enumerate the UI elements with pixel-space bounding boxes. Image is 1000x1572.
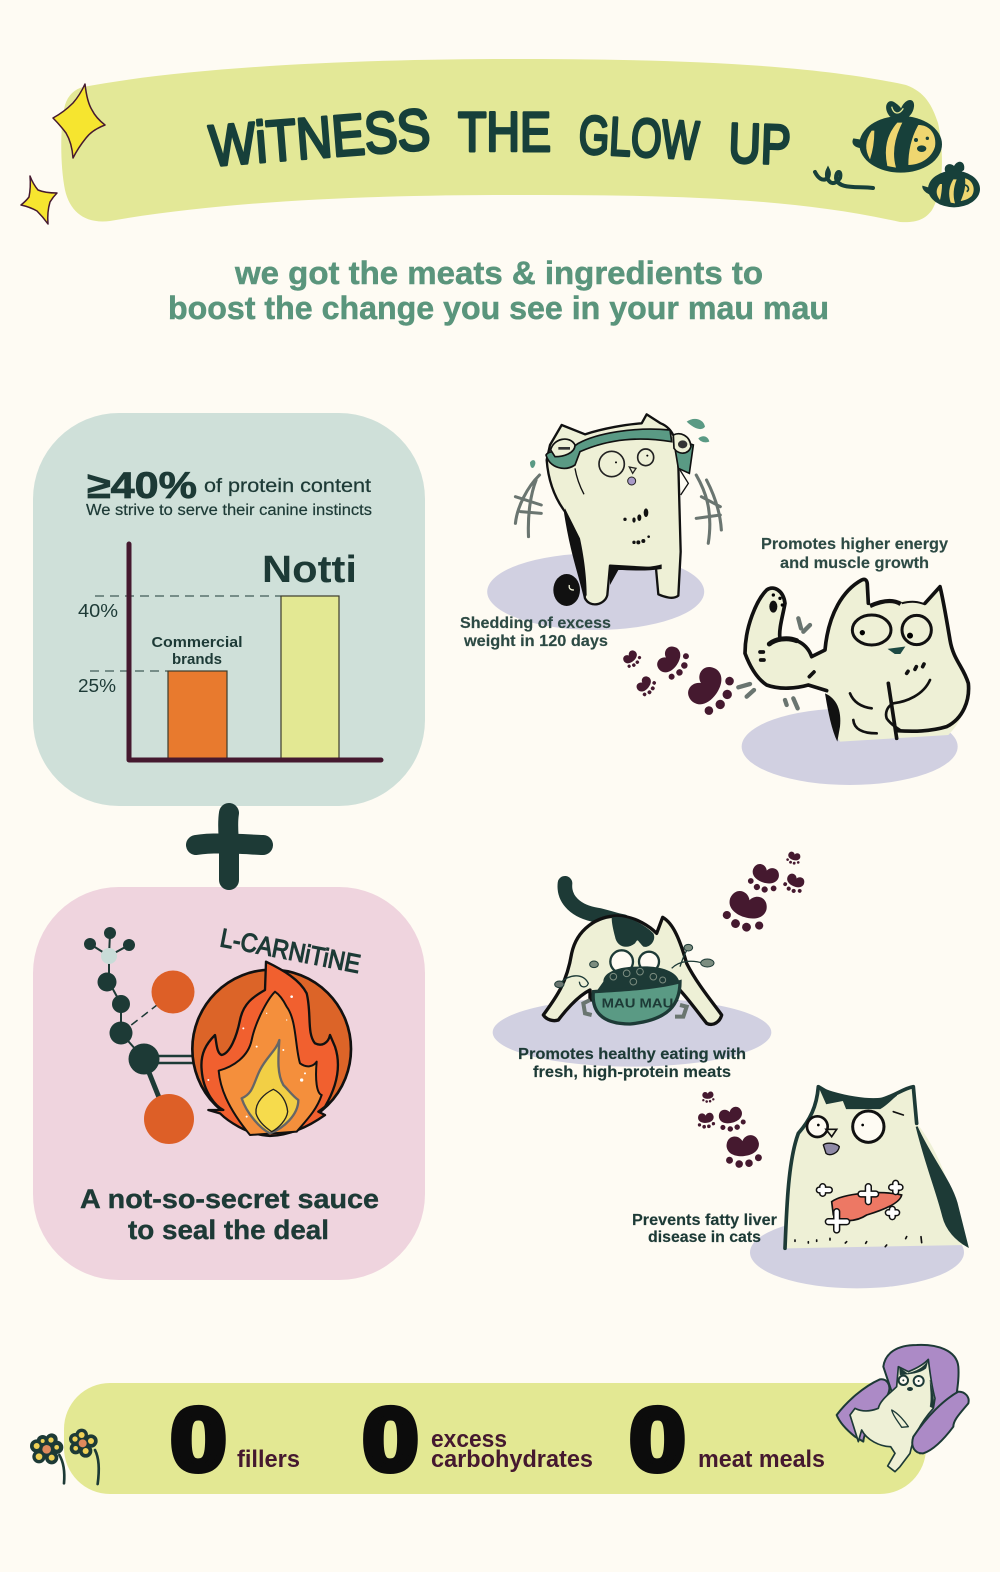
caption: healthy eating: fresh, high-protein meats <box>533 1064 731 1081</box>
title: witness the glow up: GLOW <box>577 105 700 171</box>
protein label: of protein content <box>204 475 372 497</box>
zero excess carbohydrates <box>362 1389 593 1489</box>
icon: bee trail <box>815 170 873 188</box>
icon: small bee <box>922 162 980 207</box>
caption: energy and muscle: and muscle growth <box>780 555 929 572</box>
icon: plus sign <box>196 813 263 880</box>
heading: 40 percent protein: ≥40% <box>87 465 197 506</box>
motion lines: exercising <box>515 475 721 543</box>
zero fillers: 0 <box>170 1389 226 1489</box>
subtitle: we got the meats & ingredients to <box>234 255 763 291</box>
zero meat meals <box>630 1389 825 1489</box>
caption: energy and muscle: Promotes higher energy <box>761 536 948 553</box>
caption: shedding weight: Shedding of excess <box>460 615 611 632</box>
subtitle: boost the change you see in your mau mau <box>168 290 829 326</box>
subtitle <box>168 255 829 326</box>
protein note: We strive to serve their canine instincts <box>86 502 372 519</box>
panel: zero claims <box>64 1383 926 1494</box>
panel: protein content <box>33 413 425 806</box>
caption: fatty liver: Prevents fatty liver <box>632 1212 777 1229</box>
caption: shedding weight: weight in 120 days <box>463 633 608 650</box>
panel caption: to seal the deal <box>128 1215 329 1245</box>
zero fillers <box>170 1389 300 1489</box>
cat: eating from bowl: MAU MAU <box>602 996 673 1011</box>
title banner <box>61 59 942 222</box>
zero meat meals: meat meals <box>698 1446 825 1473</box>
panel: l-carnitine <box>33 887 425 1280</box>
zero meat meals: 0 <box>630 1389 686 1489</box>
icon: paw prints middle <box>720 851 807 936</box>
zero excess carbohydrates: excess <box>431 1426 507 1453</box>
panel caption: A not-so-secret sauce <box>80 1184 379 1214</box>
bar: commercial brands <box>168 671 227 760</box>
bar: notti <box>281 596 339 760</box>
title: witness the glow up <box>207 97 792 179</box>
chart axes <box>129 544 381 760</box>
cat: flexing muscle <box>738 579 969 785</box>
bar chart <box>78 544 381 760</box>
label: l-carnitine: L-CARNiTiNE <box>218 922 363 979</box>
title: witness the glow up: WiTNESS <box>207 97 432 179</box>
molecule diagram <box>84 927 196 1144</box>
label: commercial brands: Commercial <box>152 634 242 651</box>
caption: healthy eating: Promotes healthy eating with <box>518 1046 746 1063</box>
cat in armchair <box>837 1345 969 1472</box>
icon: flame in circle <box>192 962 351 1136</box>
axis label 25 percent: 25% <box>78 675 116 696</box>
axis label 40 percent: 40% <box>78 600 118 621</box>
icon: paw prints upper <box>621 642 741 720</box>
zero excess carbohydrates: carbohydrates <box>431 1446 593 1473</box>
label: notti: Notti <box>262 549 357 591</box>
icon: flowers <box>30 1429 99 1484</box>
label: commercial brands: brands <box>172 651 222 668</box>
zero fillers: fillers <box>237 1446 300 1473</box>
cat: healthy liver <box>750 1087 967 1288</box>
title: witness the glow up: THE <box>458 100 551 163</box>
icon: large bee <box>852 100 942 173</box>
zero excess carbohydrates: 0 <box>362 1389 418 1489</box>
icon: sparkles <box>21 84 105 224</box>
title: witness the glow up: UP <box>728 111 792 176</box>
icon: paw prints lower <box>697 1091 763 1169</box>
cat shadow: exercising <box>487 553 704 630</box>
cat: exercising with band <box>530 414 709 606</box>
cat: eating from bowl <box>493 883 771 1067</box>
caption: fatty liver: disease in cats <box>648 1229 761 1246</box>
